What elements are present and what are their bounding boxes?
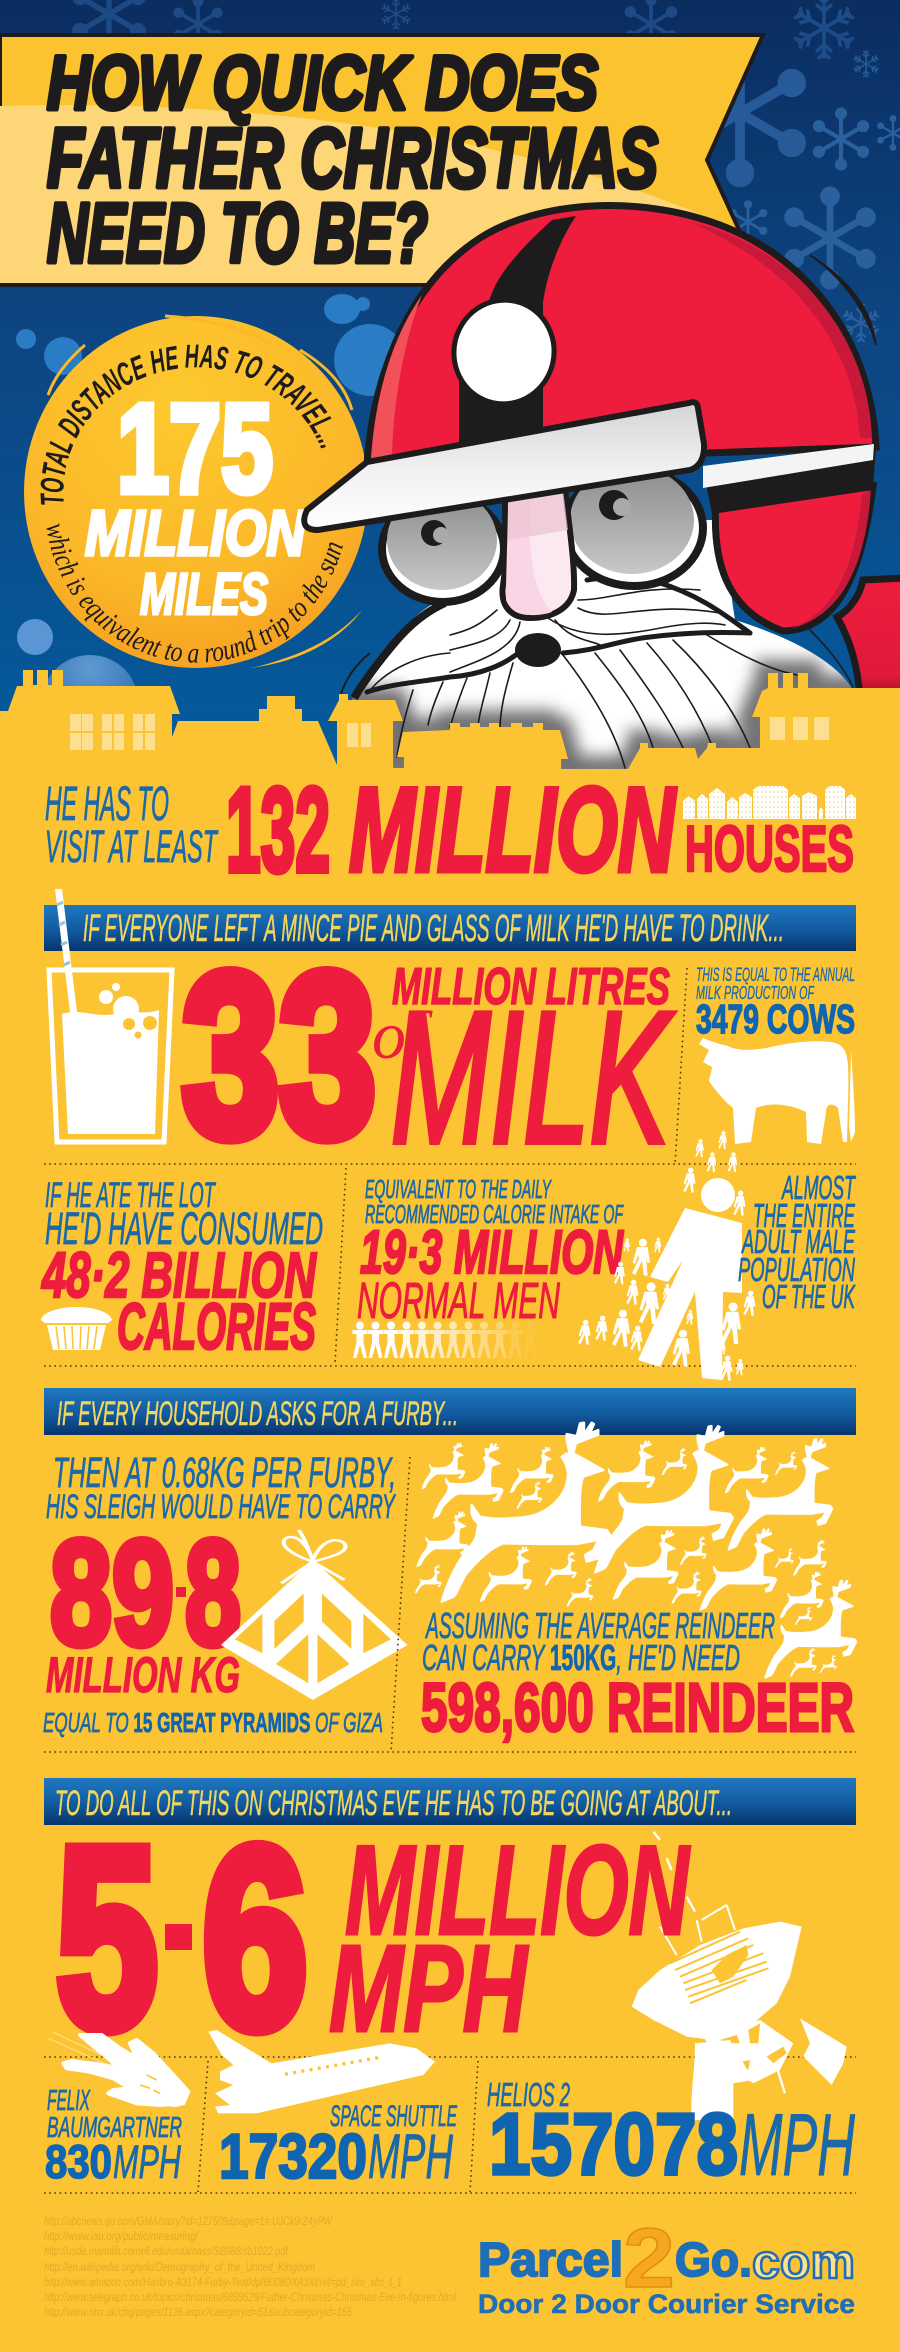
Parcel2Go logo: Door 2 Door Courier Service [478, 2289, 855, 2319]
divider line [44, 2057, 856, 2193]
hat band strap [703, 444, 876, 514]
icon: cow [699, 1038, 848, 1144]
night sky header [0, 0, 900, 775]
hat dome [367, 206, 876, 465]
stat: 19.3 million normal men: 19·3 MILLION [360, 1218, 624, 1286]
title text: NEED TO BE? [47, 186, 428, 280]
rooftop skyline [0, 670, 900, 800]
stat: 89.8 million kg: HIS SLEIGH WOULD HAVE TO CARRY [46, 1488, 396, 1526]
badge figure [85, 378, 306, 627]
shoulder [837, 578, 900, 700]
comparison: space shuttle: 17320 [219, 2122, 367, 2192]
Father Christmas illustration [301, 202, 900, 769]
nose [502, 487, 574, 618]
icon: Helios 2 probe [632, 1832, 847, 2120]
stat: 19.3 million normal men [352, 1174, 624, 1358]
sources list: http://www.telegraph.co.uk/topics/christmas/6859529/Father-Christmas-Christmas-Eve-in-figures.html [44, 2290, 456, 2304]
icon: cupcake [41, 1307, 112, 1350]
stat: 132 million houses: VISIT AT LEAST [45, 821, 219, 872]
divider lines [44, 1457, 856, 1752]
bow [281, 1530, 346, 1583]
divider lines [44, 968, 856, 1366]
sources list: http://en.wikipedia.org/wiki/Demography_of_the_United_Kingdom [44, 2260, 315, 2274]
comparison: Felix Baumgartner [45, 2085, 182, 2188]
stat: 48.2 billion calories [41, 1176, 323, 1363]
badge figure: 175 [117, 378, 273, 519]
stat: 598,600 reindeer [421, 1605, 854, 1746]
badge arc heading: TOTAL DISTANCE HE HAS TO TRAVEL... [40, 344, 332, 505]
stat: 48.2 billion calories: HE'D HAVE CONSUMED [45, 1203, 323, 1254]
stat: 89.8 million kg: 89 [50, 1509, 174, 1676]
title text: HOW QUICK DOES [47, 41, 598, 126]
comparison: Helios 2: 157078 [489, 2096, 738, 2193]
hat brim [304, 402, 704, 530]
sources list [44, 2214, 456, 2319]
callout: adult male population [738, 1169, 857, 1315]
comparison: Felix Baumgartner: FELIX [47, 2085, 91, 2117]
stat: 33 million litres of milk: of [372, 997, 433, 1073]
sources list: http://www.amazon.com/Hasbro-A3174-Furby-Teal/dp/B008DXA3XI/ref=pd_sim_sbs_t_1 [44, 2275, 402, 2289]
stat: 598,600 reindeer: CAN CARRY 150KG, HE'D NEED [422, 1637, 740, 1678]
Parcel2Go logo: 2 [623, 2211, 675, 2305]
icon: row of houses [683, 786, 856, 819]
comparison: space shuttle: MPH [368, 2122, 453, 2192]
icon: big man among small men [578, 1131, 755, 1381]
Parcel2Go logo: Parcel [478, 2234, 623, 2287]
reindeer herd [415, 1423, 857, 1678]
callout: cows [696, 965, 855, 1144]
stat: 19.3 million normal men: EQUIVALENT TO THE DAILY [365, 1174, 552, 1204]
comparison: space shuttle [219, 2100, 458, 2192]
stat: 48.2 billion calories: 48·2 BILLION [41, 1239, 317, 1311]
hat ear flap [715, 486, 873, 631]
icon: row of paper-doll men [352, 1322, 538, 1358]
title text: FATHER CHRISTMAS [47, 111, 658, 205]
Parcel2Go logo [478, 2211, 855, 2319]
stat: 19.3 million normal men: RECOMMENDED CALORIE INTAKE OF [365, 1199, 624, 1229]
stat: 48.2 billion calories: IF HE ATE THE LOT [45, 1176, 216, 1215]
stat: 5.6 million mph: MPH [329, 1921, 529, 2058]
stat: 5.6 million mph: 6 [202, 1793, 308, 2082]
stat: 89.8 million kg [43, 1449, 396, 1738]
callout: cows: MILK PRODUCTION OF [696, 983, 815, 1003]
comparison: Helios 2 [487, 2076, 855, 2194]
stat: 89.8 million kg: MILLION KG [46, 1647, 240, 1703]
badge arc caption: which is equivalent to a round trip to the sun [46, 523, 343, 663]
stat: 132 million houses: HE HAS TO [45, 778, 169, 831]
distance badge [24, 314, 365, 668]
stat: 19.3 million normal men: NORMAL MEN [357, 1272, 560, 1329]
Parcel2Go logo: com [752, 2236, 855, 2289]
stat: 33 million litres of milk: MILLION LITRES [392, 958, 670, 1016]
stat: 33 million litres of milk [182, 926, 674, 1185]
glasses [382, 466, 703, 602]
icon: space shuttle [208, 2030, 435, 2113]
stat: 48.2 billion calories: CALORIES [117, 1289, 316, 1363]
stat: 132 million houses: 132 [226, 763, 330, 897]
comparison: space shuttle: SPACE SHUTTLE [330, 2100, 458, 2133]
title text [47, 41, 658, 280]
icon: gift-wrapped pyramid [221, 1530, 408, 1700]
pom-pom [444, 291, 564, 413]
stat: 132 million houses: MILLION [349, 763, 677, 897]
comparison: Helios 2: HELIOS 2 [487, 2076, 570, 2113]
badge figure: MILLION [85, 497, 306, 569]
sources list: http://abcnews.go.com/GMA/story?id=127509&page=1#.UJCk9rZ4yPW [44, 2214, 333, 2228]
Parcel2Go logo: Go. [675, 2234, 752, 2287]
icon: Felix Baumgartner [48, 2032, 188, 2107]
stat: 5.6 million mph [56, 1793, 691, 2082]
sources list: http://www.iau.org/public/measuring/ [44, 2229, 199, 2243]
stat: 5.6 million mph: MILLION [345, 1819, 691, 1961]
stat: 89.8 million kg: THEN AT 0.68KG PER FURBY, [53, 1449, 396, 1497]
blue bubbles [16, 294, 406, 749]
stat: 33 million litres of milk: MILK [391, 973, 674, 1182]
banner: furby: IF EVERY HOUSEHOLD ASKS FOR A FURBY... [57, 1395, 458, 1433]
comparison: Felix Baumgartner: BAUMGARTNER [47, 2112, 182, 2144]
comparison: Felix Baumgartner: 830 [45, 2135, 112, 2188]
badge figure: MILES [140, 562, 268, 627]
sources list: http://www.nhs.uk/chq/pages/1126.aspx?categoryid=51&subcategoryid=165 [44, 2305, 352, 2319]
icon: glass of milk [49, 889, 172, 1142]
stat: 132 million houses [45, 763, 856, 897]
title banner [0, 35, 763, 285]
beard [340, 520, 854, 769]
stat: 5.6 million mph: 5 [56, 1793, 158, 2082]
sources list: http://usda.mannlib.cornell.edu/usda/nass/SB988/sb1022.pdf [44, 2244, 289, 2258]
snowflakes [72, 0, 900, 342]
stat: 89.8 million kg: EQUAL TO 15 GREAT PYRAMIDS OF GIZA [43, 1707, 383, 1738]
stat: 89.8 million kg: 8 [185, 1509, 241, 1676]
comparison: Felix Baumgartner: MPH [113, 2135, 181, 2188]
stat: 33 million litres of milk: 33 [182, 926, 376, 1185]
